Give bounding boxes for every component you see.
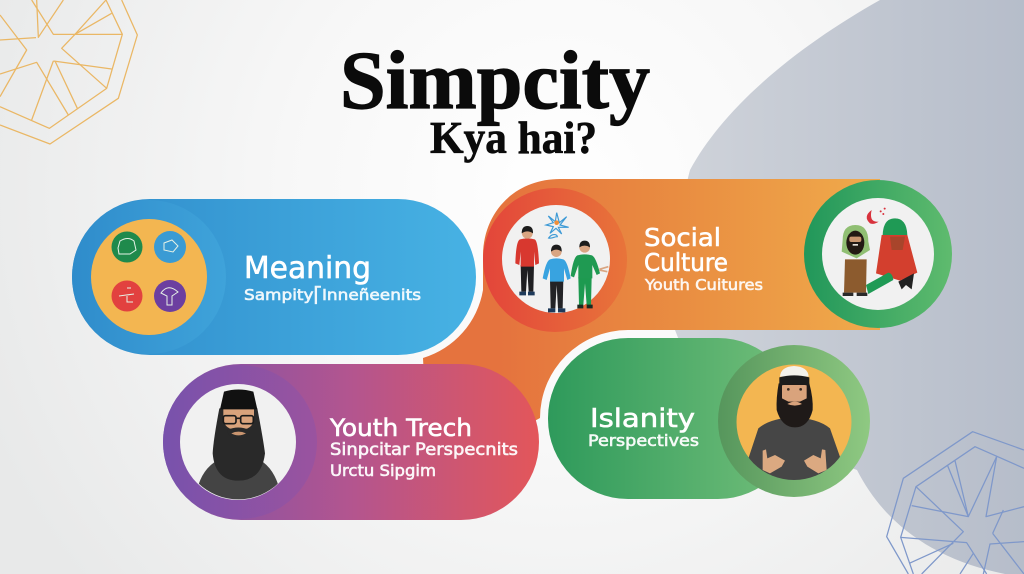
man in blue bbox=[543, 245, 571, 312]
purple badge bbox=[154, 280, 186, 312]
purple ring bbox=[163, 365, 317, 519]
green pill bbox=[548, 338, 798, 499]
left white disc bbox=[502, 205, 610, 313]
subheading: perspectives: Perspectives bbox=[588, 431, 699, 450]
icon: bearded man with glasses bbox=[198, 389, 278, 500]
panel: meaning bbox=[72, 199, 476, 355]
inner ring bbox=[72, 200, 226, 354]
right white disc bbox=[822, 198, 934, 310]
yellow disc bbox=[736, 364, 852, 480]
heading: islanity: Islanity bbox=[590, 404, 695, 434]
subheading line 1: Sinpcitar Perspecnits bbox=[330, 440, 518, 460]
red badge bbox=[112, 280, 142, 312]
white disc bbox=[180, 384, 296, 500]
title main line: Simpcity bbox=[340, 34, 650, 126]
background gray curved shape bbox=[674, 0, 1024, 574]
subheading line 2: Urctu Sipgim bbox=[330, 461, 436, 480]
heading: meaning: Meaning bbox=[244, 251, 371, 286]
orange ribbon with connector bbox=[423, 179, 880, 440]
icon cluster: four small badges bbox=[112, 231, 186, 312]
ring bbox=[718, 345, 870, 497]
idea network icon bbox=[546, 213, 569, 238]
man in green bbox=[571, 241, 608, 308]
man in red bbox=[515, 226, 539, 295]
panel: youth trech bbox=[163, 364, 539, 520]
panel: social culture bbox=[423, 179, 952, 440]
magenta pill bbox=[163, 364, 539, 520]
heading: social culture: Social bbox=[644, 223, 721, 252]
draped figure bbox=[866, 218, 917, 294]
icon: hooded man and dressed figure bbox=[842, 208, 917, 296]
hooded man bbox=[842, 225, 870, 296]
blue badge bbox=[154, 231, 186, 263]
crescent and stars bbox=[867, 208, 886, 224]
heading: youth trech: Youth Trech bbox=[329, 414, 472, 442]
left ring bbox=[483, 188, 627, 332]
title bbox=[340, 34, 650, 163]
decorative geometric star: top left bbox=[0, 0, 137, 144]
right ring bbox=[804, 180, 952, 328]
subheading: youth cultures: Youth Cuitures bbox=[644, 276, 763, 294]
green badge bbox=[112, 232, 142, 262]
icon: three young people bbox=[515, 213, 608, 312]
icon: man with white cap bbox=[747, 366, 842, 487]
subheading: Sampity⎡Inneñeenits bbox=[244, 286, 421, 304]
heading: culture: Culture bbox=[644, 248, 728, 277]
yellow disc bbox=[91, 219, 207, 335]
panel: islanity bbox=[548, 338, 870, 499]
decorative geometric star: bottom right bbox=[887, 432, 1024, 574]
blue pill bbox=[72, 199, 476, 355]
title sub line: Kya hai? bbox=[430, 113, 597, 163]
